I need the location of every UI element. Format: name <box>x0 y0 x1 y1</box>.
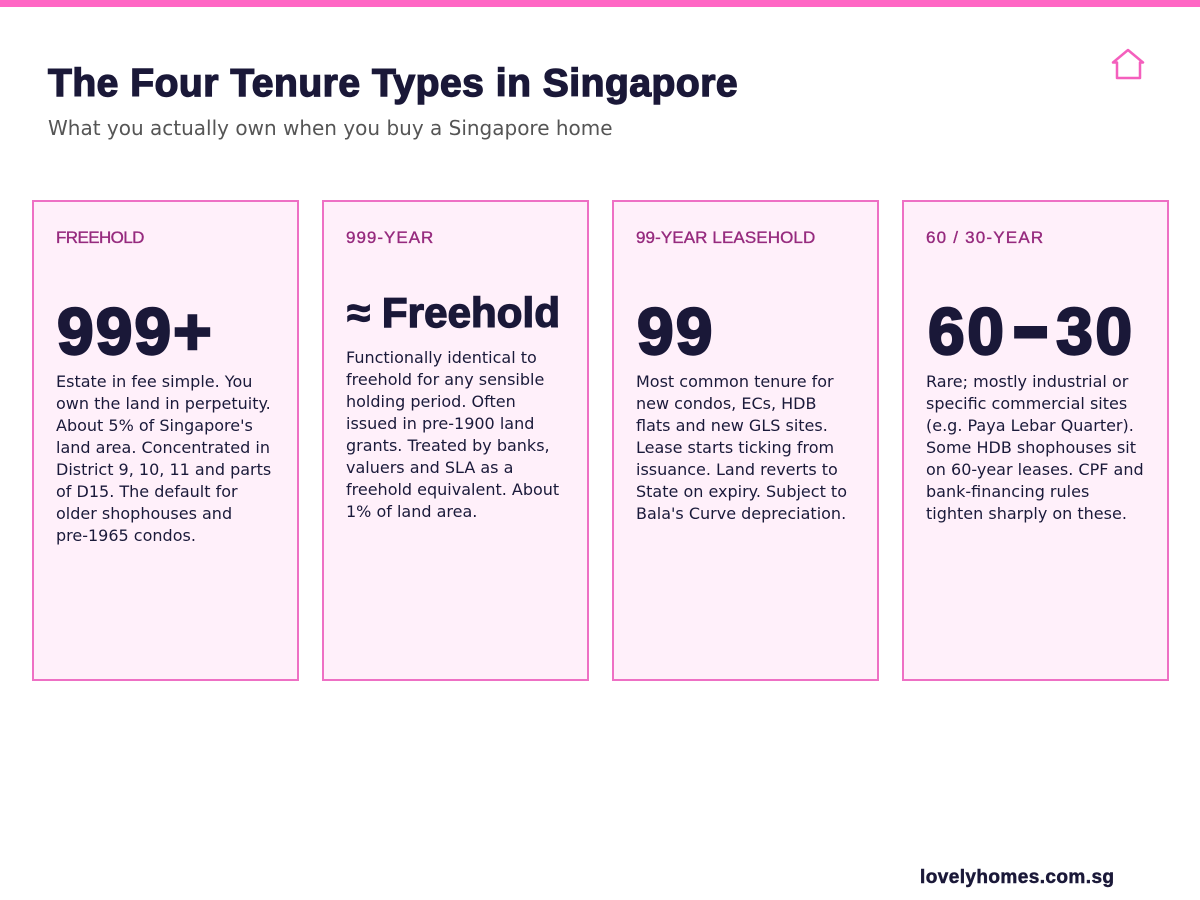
999-year description: holding period. Often <box>346 392 516 411</box>
panel: 99-year leasehold <box>612 200 879 681</box>
60/30-year description: Some HDB shophouses sit <box>926 438 1136 457</box>
freehold description: Estate in fee simple. You <box>56 372 252 391</box>
999-year description: freehold equivalent. About <box>346 480 559 499</box>
999-year label: 999-YEAR <box>346 228 434 247</box>
panel: freehold <box>32 200 299 681</box>
999-year description: grants. Treated by banks, <box>346 436 550 455</box>
99-year description: flats and new GLS sites. <box>636 416 828 435</box>
99-year description: Bala's Curve depreciation. <box>636 504 846 523</box>
999-year description <box>346 348 559 521</box>
panel: 999-year <box>322 200 589 681</box>
99-year description: Lease starts ticking from <box>636 438 834 457</box>
999-year description: Functionally identical to <box>346 348 537 367</box>
60/30-year description: (e.g. Paya Lebar Quarter). <box>926 416 1134 435</box>
freehold description: own the land in perpetuity. <box>56 394 271 413</box>
freehold description: About 5% of Singapore's <box>56 416 253 435</box>
99-year description: new condos, ECs, HDB <box>636 394 816 413</box>
freehold description: pre-1965 condos. <box>56 526 196 545</box>
60/30-year description: Rare; mostly industrial or <box>926 372 1128 391</box>
60/30-year description: tighten sharply on these. <box>926 504 1127 523</box>
freehold description: of D15. The default for <box>56 482 238 501</box>
60/30-year label: 60 / 30-YEAR <box>926 228 1044 247</box>
60/30-year description: bank-financing rules <box>926 482 1089 501</box>
freehold description: District 9, 10, 11 and parts <box>56 460 271 479</box>
99-year figure: 99 <box>637 294 714 368</box>
999-year description: issued in pre-1900 land <box>346 414 534 433</box>
freehold label: FREEHOLD <box>56 228 144 247</box>
60/30-year description: on 60-year leases. CPF and <box>926 460 1144 479</box>
icon: house <box>1112 48 1144 80</box>
60/30-year description: specific commercial sites <box>926 394 1127 413</box>
title: The Four Tenure Types in Singapore <box>48 62 738 105</box>
freehold description <box>56 372 271 545</box>
panel: 60 / 30-year <box>902 200 1169 681</box>
99-year description: Most common tenure for <box>636 372 834 391</box>
999-year description: freehold for any sensible <box>346 370 544 389</box>
999-year description: 1% of land area. <box>346 502 477 521</box>
99-year label: 99-YEAR LEASEHOLD <box>636 228 815 247</box>
60/30-year description <box>926 372 1144 523</box>
subtitle: What you actually own when you buy a Singapore home <box>48 116 613 140</box>
freehold description: older shophouses and <box>56 504 232 523</box>
freehold figure: 999+ <box>57 294 214 368</box>
60/30-year figure: 60 30 <box>928 294 1135 368</box>
999-year figure: ≈ Freehold <box>347 289 560 336</box>
footer brand: lovelyhomes.com.sg <box>920 867 1114 888</box>
freehold description: land area. Concentrated in <box>56 438 270 457</box>
999-year description: valuers and SLA as a <box>346 458 513 477</box>
99-year description: State on expiry. Subject to <box>636 482 847 501</box>
top accent bar <box>0 0 1200 7</box>
99-year description: issuance. Land reverts to <box>636 460 838 479</box>
99-year description <box>636 372 847 523</box>
60/30-year figure: – <box>1015 290 1048 364</box>
